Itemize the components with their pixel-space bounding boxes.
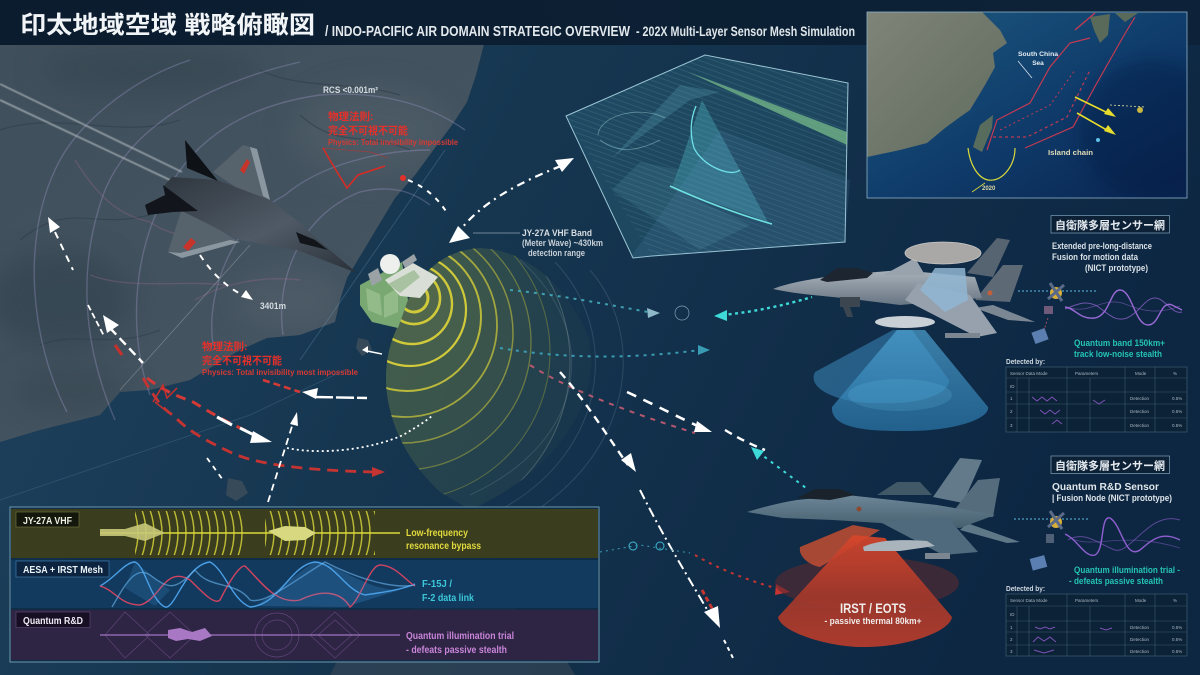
row: Quantum R&D: Quantum illumination trial — [406, 631, 514, 642]
arrow: lower callout to radar — [263, 346, 382, 399]
inset map: South China — [1018, 51, 1058, 58]
detected table: Detection — [1130, 625, 1150, 630]
row: AESA + IRST: AESA + IRST Mesh — [23, 564, 103, 576]
label: JY-27A band — [473, 228, 603, 258]
row: Quantum R&D: - defeats passive stealth — [406, 645, 507, 656]
arrow: radar to mesh plane — [449, 158, 574, 243]
detected table: 0.5% — [1172, 423, 1182, 428]
row: AESA + IRST — [11, 560, 598, 608]
quantum note: - defeats passive stealth — [1069, 576, 1163, 586]
fuselage — [163, 177, 357, 273]
row: JY-27A VHF: resonance bypass — [406, 541, 481, 552]
detected table: Sensor Data Mode — [1010, 371, 1048, 376]
detected table: 0.5% — [1172, 625, 1182, 630]
detected table: Sensor Data Mode — [1010, 598, 1048, 603]
title: 印太地域空域 戦略俯瞰図 — [20, 12, 315, 39]
row: AESA + IRST: F-15J / — [422, 579, 452, 590]
detected table: 1 — [1010, 625, 1013, 630]
badge — [1051, 456, 1170, 474]
label: distance: 3401m — [260, 301, 286, 311]
heading: (NICT prototype) — [1085, 263, 1148, 273]
label: RCS: RCS <0.001m² — [323, 85, 378, 95]
tail fins — [185, 140, 218, 181]
callout: physics lower: Physics: Total invisibility most impossible — [202, 367, 358, 377]
title: / INDO-PACIFIC AIR DOMAIN STRATEGIC OVERVIEW — [325, 23, 631, 40]
callout: physics upper — [323, 110, 458, 188]
detected table: Detected by: — [1006, 357, 1045, 366]
heading — [1052, 241, 1152, 273]
stealth fighter — [145, 140, 357, 273]
row: Quantum R&D: Quantum R&D — [23, 615, 83, 627]
detected table — [1006, 584, 1187, 656]
detected table: Detection — [1130, 637, 1150, 642]
heading: Extended pre-long-distance — [1052, 241, 1152, 251]
inset map: Sea — [1032, 60, 1044, 67]
detected table: Detection — [1130, 649, 1150, 654]
callout: physics upper: Physics: Total invisibility impossible — [328, 137, 458, 147]
title: - 202X Multi-Layer Sensor Mesh Simulation — [636, 23, 855, 39]
inset map — [867, 12, 1200, 200]
quantum waveform — [1065, 290, 1182, 325]
row: JY-27A VHF: JY-27A VHF — [23, 515, 72, 527]
rotodome — [905, 242, 981, 264]
detected table: 3 — [1010, 423, 1013, 428]
detected table: 0.5% — [1172, 409, 1182, 414]
label: IRST: IRST / EOTS — [840, 600, 906, 616]
detected table: Detected by: — [1006, 584, 1045, 593]
quantum note: Quantum band 150km+ — [1074, 338, 1165, 348]
header bar — [0, 0, 1200, 45]
arrow: fighter range — [200, 255, 253, 300]
contrails — [0, 84, 182, 180]
arrows: southern tracks — [530, 365, 790, 660]
callout: physics upper: 完全不可視不可能 — [328, 124, 408, 137]
detected table: 2 — [1010, 637, 1013, 642]
inset map: Island chain — [1048, 150, 1093, 157]
red markings — [183, 159, 250, 251]
radar emission rings — [386, 248, 624, 506]
arrow: fighter to radar — [400, 175, 447, 213]
detected table: 3 — [1010, 649, 1013, 654]
heading: | Fusion Node (NICT prototype) — [1052, 493, 1172, 503]
lower wing — [168, 208, 240, 258]
quantum waveform — [1065, 518, 1180, 555]
side panel: lower sensor — [1006, 456, 1187, 656]
icon: satellites — [1014, 511, 1090, 571]
detected table: Mode — [1135, 371, 1147, 376]
map: mainland coast — [0, 44, 575, 675]
fighter lower — [747, 458, 1020, 647]
row: AESA + IRST: F-2 data link — [422, 593, 474, 604]
row: JY-27A VHF — [11, 509, 598, 558]
label: JY-27A band: (Meter Wave) ~430km — [522, 238, 603, 248]
icon: satellites — [1018, 283, 1098, 344]
detected table: % — [1173, 371, 1177, 376]
sensor mesh plane — [566, 55, 850, 258]
badge: 自衛隊多層センサー網 — [1055, 218, 1165, 232]
side panel: upper sensor — [1006, 216, 1187, 432]
heading — [1052, 481, 1172, 503]
quantum note: track low-noise stealth — [1074, 349, 1162, 359]
detected table: 0.5% — [1172, 637, 1182, 642]
detected table: Detection — [1130, 409, 1150, 414]
radar cones — [814, 330, 988, 431]
row: Quantum R&D — [11, 610, 598, 660]
detected table: Parameters — [1075, 371, 1099, 376]
label: IRST — [824, 600, 922, 626]
detected table: 0.5% — [1172, 649, 1182, 654]
label: IRST: - passive thermal 80km+ — [824, 616, 922, 626]
detected table: Mode — [1135, 598, 1147, 603]
detected table: Detection — [1130, 423, 1150, 428]
quantum note: Quantum illumination trial - — [1074, 565, 1180, 575]
IRST cones — [775, 525, 959, 647]
range rings over the coast — [0, 60, 465, 500]
legend panel: comparison of detection layers — [10, 507, 599, 662]
detected table: 2 — [1010, 409, 1013, 414]
callout: physics lower: 物理法則: — [202, 340, 248, 353]
detected table: 0.5% — [1172, 396, 1182, 401]
quantum note — [1069, 565, 1180, 586]
detected table: 1 — [1010, 396, 1013, 401]
badge: 自衛隊多層センサー網 — [1055, 458, 1165, 472]
detected table — [1006, 357, 1187, 432]
detected table: Parameters — [1075, 598, 1099, 603]
badge — [1051, 216, 1170, 233]
inset map: 2020 — [982, 186, 996, 192]
callout: physics lower — [202, 340, 358, 377]
detected table: ID — [1010, 612, 1015, 617]
arrows: teal data links — [500, 290, 812, 488]
callout: physics upper: 物理法則: — [328, 110, 374, 123]
label: JY-27A band: detection range — [528, 248, 585, 258]
heading: Quantum R&D Sensor — [1052, 481, 1159, 493]
callout: physics lower: 完全不可視不可能 — [202, 354, 282, 367]
heading: Fusion for motion data — [1052, 252, 1138, 262]
title — [20, 12, 855, 40]
label: JY-27A band: JY-27A VHF Band — [522, 228, 592, 239]
detected table: % — [1173, 598, 1177, 603]
row: JY-27A VHF: Low-frequency — [406, 528, 468, 539]
upper wing — [213, 145, 270, 200]
detected table: Detection — [1130, 396, 1150, 401]
arrows: western approach tracks — [48, 217, 433, 502]
detected table: ID — [1010, 384, 1015, 389]
icon: ground radar JY-27A — [360, 254, 438, 328]
AEW fighter — [773, 238, 1035, 431]
quantum note — [1074, 338, 1165, 359]
